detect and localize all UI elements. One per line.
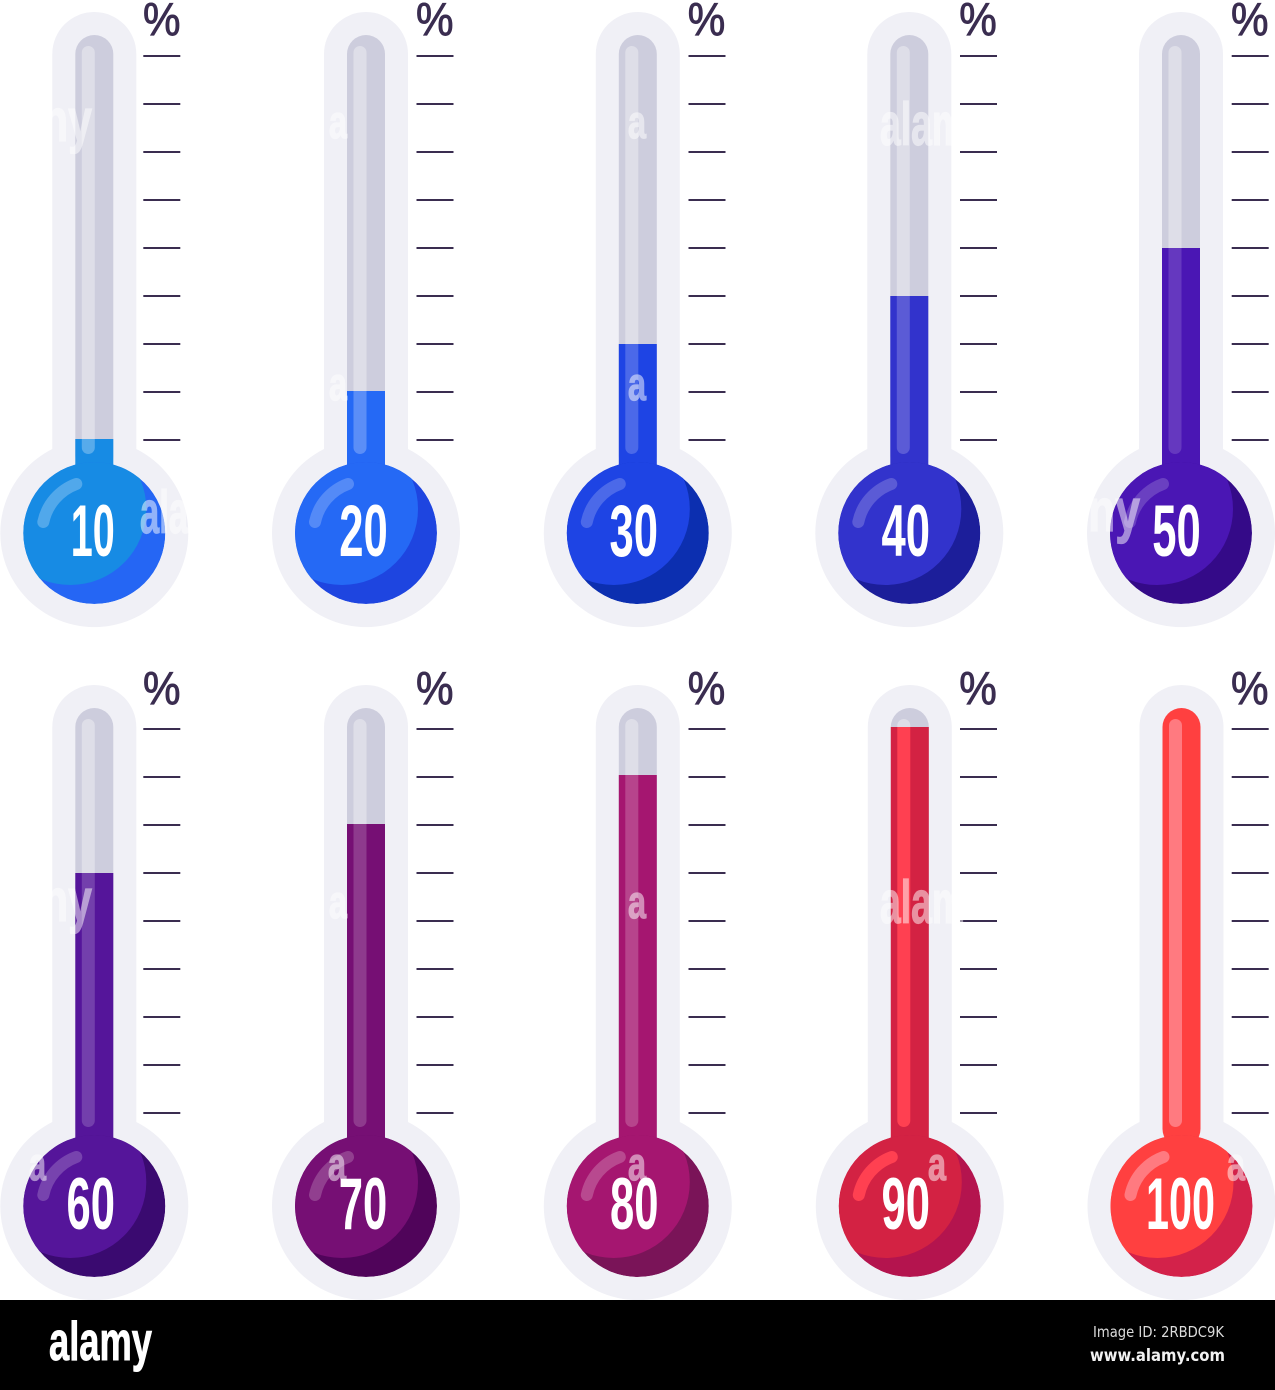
- value: 50: [1152, 491, 1201, 572]
- glass halo: [815, 12, 1003, 627]
- stock watermark fragments: a: [329, 876, 347, 928]
- empty tube: [619, 708, 657, 1148]
- glass halo: [1088, 685, 1275, 1300]
- value: 60: [67, 1164, 115, 1245]
- bulb shine: [315, 484, 348, 522]
- scale ticks: [688, 56, 726, 440]
- bulb: [838, 464, 980, 604]
- empty tube: [1162, 35, 1200, 475]
- scale ticks: [416, 729, 454, 1113]
- stock watermark fragments: a: [29, 1138, 46, 1190]
- glass halo: [272, 12, 460, 627]
- bulb shine: [858, 484, 891, 522]
- scale ticks: [688, 729, 726, 1113]
- bulb: [1110, 464, 1252, 604]
- thermometer 100 percent: [1082, 662, 1275, 1300]
- stock watermark fragments: a: [928, 1138, 946, 1190]
- empty tube: [347, 708, 385, 1148]
- value: 100: [1146, 1164, 1215, 1245]
- stock watermark fragments: alam: [880, 869, 965, 936]
- stock watermark fragments: ala: [140, 479, 188, 546]
- bulb shine: [315, 1157, 348, 1195]
- liquid column: [891, 727, 929, 1152]
- tube highlight: [82, 719, 95, 1127]
- value: 20: [339, 491, 388, 572]
- empty tube: [891, 708, 929, 1148]
- percent sign: %: [143, 662, 180, 714]
- stock watermark fragments: ny: [1088, 477, 1140, 544]
- liquid column: [619, 775, 657, 1152]
- percent sign: %: [959, 662, 997, 714]
- bulb: [295, 1138, 437, 1277]
- alamy logo: alamy: [49, 1310, 152, 1372]
- bulb shine: [1130, 484, 1163, 522]
- value: 90: [881, 1164, 930, 1245]
- stock watermark fragments: alam: [880, 91, 965, 158]
- empty tube: [890, 35, 928, 475]
- liquid highlight: [897, 727, 910, 1127]
- stock watermark fragments: a: [628, 96, 646, 148]
- glass halo: [816, 685, 1004, 1300]
- liquid highlight: [897, 296, 910, 454]
- value: 40: [881, 491, 930, 572]
- scale ticks: [960, 729, 997, 1113]
- liquid highlight: [625, 344, 638, 454]
- percent sign: %: [1231, 662, 1268, 714]
- liquid highlight: [82, 439, 95, 454]
- bulb shine: [587, 1157, 620, 1195]
- liquid highlight: [1168, 248, 1182, 454]
- stock watermark fragments: a: [329, 96, 347, 148]
- scale ticks: [143, 729, 180, 1113]
- percent sign: %: [416, 662, 454, 714]
- bulb shine: [1130, 1157, 1164, 1195]
- empty tube: [619, 35, 657, 475]
- bulb: [566, 464, 709, 604]
- value: 70: [339, 1164, 387, 1245]
- glass halo: [544, 12, 732, 627]
- liquid highlight: [1169, 719, 1182, 1127]
- thermometer 30 percent: [538, 0, 732, 627]
- thermometer 70 percent: [266, 662, 460, 1300]
- stock watermark fragments: a: [329, 358, 347, 410]
- empty tube: [347, 35, 385, 475]
- liquid column: [890, 296, 928, 479]
- thermometer 40 percent: [809, 0, 1003, 627]
- bulb: [23, 1138, 166, 1277]
- bulb shine: [859, 1157, 892, 1195]
- stock watermark fragments: a: [628, 358, 646, 410]
- tube highlight: [1168, 46, 1182, 454]
- thermometer 80 percent: [538, 662, 732, 1300]
- bulb shine: [43, 1157, 76, 1195]
- tube highlight: [625, 46, 638, 454]
- tube highlight: [897, 719, 910, 1127]
- scale ticks: [143, 56, 180, 440]
- thermometer 90 percent: [810, 662, 1004, 1300]
- scale ticks: [960, 56, 997, 440]
- thermometer 50 percent: [1081, 0, 1275, 627]
- footer bar: [0, 1300, 1275, 1390]
- bulb: [838, 1138, 981, 1277]
- stock watermark fragments: ny: [42, 867, 92, 934]
- liquid column: [1162, 248, 1200, 479]
- empty tube: [75, 35, 113, 475]
- tube highlight: [354, 719, 366, 1127]
- tube highlight: [625, 719, 638, 1127]
- scale ticks: [1232, 729, 1269, 1113]
- stock watermark fragments: a: [628, 1138, 646, 1190]
- stock watermark fragments: a: [628, 876, 646, 928]
- liquid highlight: [82, 873, 95, 1127]
- glass halo: [544, 685, 732, 1300]
- bulb: [1110, 1137, 1252, 1277]
- value: 10: [71, 491, 115, 572]
- stock watermark fragments: [29, 87, 1245, 1190]
- bulb shine: [43, 484, 76, 522]
- tube highlight: [897, 46, 910, 454]
- liquid column: [1162, 708, 1200, 1148]
- glass halo: [0, 685, 188, 1300]
- liquid column: [619, 344, 657, 479]
- bulb shine: [587, 484, 620, 522]
- value: 80: [610, 1164, 658, 1245]
- liquid column: [75, 873, 113, 1152]
- liquid highlight: [625, 775, 638, 1127]
- liquid column: [347, 824, 385, 1152]
- liquid column: [75, 439, 113, 479]
- empty tube: [75, 708, 113, 1148]
- scale ticks: [416, 56, 454, 440]
- percent sign: %: [688, 662, 725, 714]
- website: www.alamy.com: [1090, 1346, 1225, 1366]
- thermometer 10 percent: [0, 0, 188, 627]
- stock watermark fragments: a: [1227, 1138, 1245, 1190]
- tube highlight: [354, 46, 366, 454]
- liquid highlight: [354, 391, 366, 454]
- glass halo: [272, 685, 460, 1300]
- liquid highlight: [354, 824, 366, 1127]
- value: 30: [609, 491, 658, 572]
- bulb: [23, 464, 166, 604]
- glass halo: [0, 12, 188, 627]
- liquid column: [347, 391, 385, 479]
- thermometer 20 percent: [266, 0, 460, 627]
- bulb: [295, 464, 437, 604]
- scale ticks: [1232, 56, 1269, 440]
- stock watermark fragments: ny: [42, 87, 92, 154]
- bulb: [566, 1138, 709, 1277]
- thermometer 60 percent: [0, 662, 188, 1300]
- stock watermark fragments: a: [328, 1138, 346, 1190]
- glass halo: [1087, 12, 1275, 627]
- tube highlight: [82, 46, 95, 454]
- image id: Image ID: 2RBDC9K: [1093, 1323, 1225, 1341]
